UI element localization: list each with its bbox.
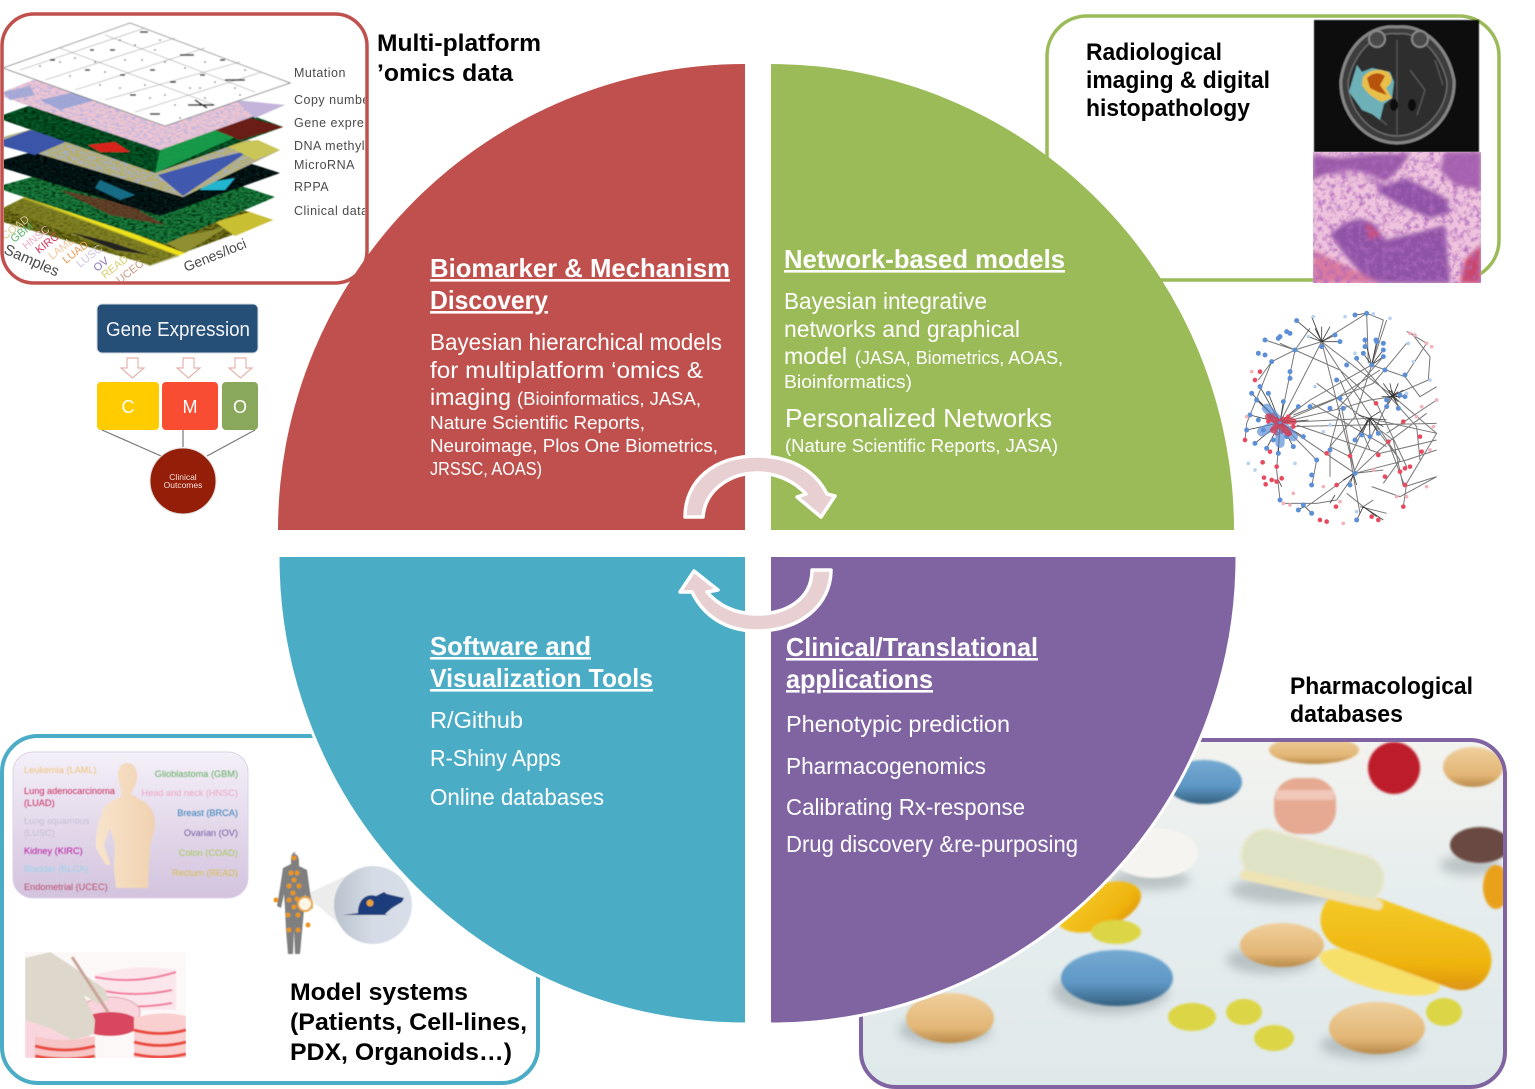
chart: cancer types body map: Head and neck (HNSC) bbox=[141, 788, 238, 798]
arrow: clockwise top bbox=[685, 456, 835, 517]
image: brain MRI with tumour segmentation bbox=[1314, 20, 1479, 152]
panel: network-based models bbox=[771, 64, 1234, 530]
panel: biomarker and mechanism discovery: for multiplatform ‘omics & bbox=[430, 357, 703, 383]
layer labels: Mutation bbox=[294, 66, 346, 80]
panel: clinical and translational applications: applications bbox=[786, 664, 933, 694]
heading: model systems: (Patients, Cell-lines, bbox=[290, 1009, 527, 1036]
panel: software and visualization tools bbox=[278, 557, 745, 1024]
image: digital histopathology slide bbox=[1313, 152, 1481, 283]
panel: multi-platform omics image bbox=[0, 14, 396, 286]
diagram: gene expression to clinical outcomes: Clinical bbox=[169, 472, 197, 482]
image: cell culture dishes bbox=[25, 952, 186, 1059]
panel: clinical and translational applications: Clinical/Translational bbox=[786, 632, 1038, 662]
heading: model systems: Model systems bbox=[290, 979, 468, 1006]
diagram: gene expression to clinical outcomes: C bbox=[122, 397, 134, 417]
chart: cancer types body map: Breast (BRCA) bbox=[177, 808, 238, 818]
panel: network-based models: model bbox=[784, 343, 847, 369]
panel: network-based models: Bioinformatics) bbox=[784, 371, 912, 392]
chart: cancer types body map: Endometrial (UCEC) bbox=[24, 882, 108, 892]
heading: model systems: PDX, Organoids…) bbox=[290, 1039, 512, 1066]
chart: cancer types body map: Kidney (KIRC) bbox=[24, 846, 83, 856]
layer labels: LUAD bbox=[60, 239, 91, 266]
panel: biomarker and mechanism discovery: JRSSC, AOAS) bbox=[430, 458, 542, 479]
panel: biomarker and mechanism discovery: Nature Scientific Reports, bbox=[430, 412, 645, 433]
chart: cancer types body map: Rectum (READ) bbox=[172, 868, 238, 878]
panel: network-based models: (Nature Scientific Reports, JASA) bbox=[785, 435, 1058, 456]
heading: multi-platform omics: ’omics data bbox=[377, 60, 513, 87]
layer labels: OV bbox=[91, 255, 112, 274]
image: personalized network graph bbox=[1245, 313, 1437, 523]
diagram: gene expression to clinical outcomes: Gene Expression bbox=[106, 319, 250, 341]
panel: clinical and translational applications bbox=[771, 557, 1237, 1024]
panel: software and visualization tools: Online databases bbox=[430, 784, 604, 810]
layer labels: Samples bbox=[1, 241, 62, 280]
body silhouette bbox=[96, 763, 155, 888]
panel: network-based models: Bayesian integrative bbox=[784, 288, 987, 314]
layer labels: Gene expression bbox=[294, 116, 396, 130]
layer labels: UCEC bbox=[114, 258, 146, 286]
panel: biomarker and mechanism discovery: (Bioinformatics, JASA, bbox=[517, 388, 701, 409]
chart: cancer types body map: Lung adenocarcinoma bbox=[24, 786, 116, 796]
panel: clinical and translational applications: Drug discovery &re-purposing bbox=[786, 831, 1078, 857]
diagram: gene expression to clinical outcomes bbox=[97, 304, 258, 514]
layer labels: Copy number bbox=[294, 93, 375, 107]
panel: software and visualization tools: Visualization Tools bbox=[430, 663, 653, 693]
heading: pharmacological databases: databases bbox=[1290, 701, 1403, 728]
chart: cancer types body map: (LUSC) bbox=[24, 828, 55, 838]
layer labels bbox=[0, 66, 396, 286]
omics layer stack bbox=[3, 23, 290, 266]
heading: model systems bbox=[290, 979, 527, 1066]
layer labels: HNSC bbox=[20, 224, 52, 252]
heading: pharmacological databases bbox=[1290, 673, 1473, 728]
layer labels: Genes/loci bbox=[181, 235, 248, 275]
chart: cancer types body map: Ovarian (OV) bbox=[184, 828, 238, 838]
layer labels: READ bbox=[99, 253, 131, 281]
panel: radiological imaging frame bbox=[1047, 16, 1499, 280]
heading: radiological imaging bbox=[1086, 39, 1270, 122]
heading: radiological imaging: Radiological bbox=[1086, 39, 1222, 66]
layer labels: GBM bbox=[8, 220, 36, 245]
chart: cancer types body map: Glioblastoma (GBM) bbox=[155, 769, 238, 779]
layer labels: KIRC bbox=[33, 231, 62, 256]
panel: network-based models: networks and graphical bbox=[784, 316, 1020, 342]
heading: radiological imaging: histopathology bbox=[1086, 95, 1250, 122]
layer labels: LAML bbox=[46, 235, 77, 262]
arrow: clockwise bottom bbox=[680, 570, 831, 631]
layer labels: DNA methylation bbox=[294, 139, 395, 153]
panel: biomarker and mechanism discovery: Biomarker & Mechanism bbox=[430, 253, 730, 283]
heading: radiological imaging: imaging & digital bbox=[1086, 67, 1270, 94]
panel: clinical and translational applications: Pharmacogenomics bbox=[786, 753, 986, 779]
icon: patient to mouse xenograft bbox=[276, 852, 412, 954]
panel: biomarker and mechanism discovery bbox=[278, 64, 745, 530]
chart: cancer types body map: (LUAD) bbox=[24, 798, 55, 808]
panel: software and visualization tools: Software and bbox=[430, 631, 591, 661]
panel: biomarker and mechanism discovery: imaging bbox=[430, 384, 511, 410]
heading: multi-platform omics: Multi-platform bbox=[377, 30, 541, 57]
heading: multi-platform omics bbox=[377, 30, 541, 87]
panel: software and visualization tools: R/Github bbox=[430, 707, 523, 733]
panel: clinical and translational applications: Calibrating Rx-response bbox=[786, 794, 1025, 820]
chart: cancer types body map: Colon (COAD) bbox=[179, 848, 238, 858]
diagram: gene expression to clinical outcomes: Outcomes bbox=[164, 480, 202, 490]
layer labels: MicroRNA bbox=[294, 158, 355, 172]
panel: software and visualization tools: R-Shiny Apps bbox=[430, 745, 561, 771]
chart: cancer types body map: Lung squamous bbox=[24, 816, 90, 826]
layer labels: Clinical data bbox=[294, 204, 369, 218]
panel: clinical and translational applications: Phenotypic prediction bbox=[786, 711, 1010, 737]
layer labels: RPPA bbox=[294, 180, 329, 194]
panel: biomarker and mechanism discovery: Discovery bbox=[430, 285, 549, 315]
chart: cancer types body map: Leukemia (LAML) bbox=[24, 765, 97, 775]
heading: pharmacological databases: Pharmacological bbox=[1290, 673, 1473, 700]
panel: network-based models: Personalized Networks bbox=[785, 403, 1052, 433]
diagram: gene expression to clinical outcomes: O bbox=[233, 397, 247, 417]
panel: biomarker and mechanism discovery: Neuroimage, Plos One Biometrics, bbox=[430, 435, 718, 456]
chart: cancer types body map bbox=[13, 752, 248, 898]
panel: biomarker and mechanism discovery: Bayesian hierarchical models bbox=[430, 329, 722, 355]
diagram: gene expression to clinical outcomes: M bbox=[182, 397, 198, 417]
image: pharmacological pills bbox=[861, 736, 1510, 1087]
panel: network-based models: Network-based models bbox=[784, 244, 1065, 274]
panel: model systems frame bbox=[2, 736, 538, 1083]
chart: cancer types body map: Bladder (BLCA) bbox=[24, 864, 88, 874]
layer labels: COAD bbox=[0, 213, 32, 242]
layer labels: LUSC bbox=[74, 243, 105, 270]
panel: network-based models: (JASA, Biometrics, AOAS, bbox=[855, 347, 1063, 368]
